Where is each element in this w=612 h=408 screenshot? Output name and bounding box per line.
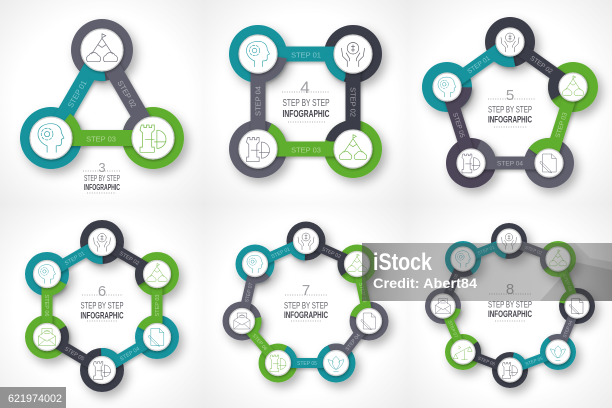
- band: step 01: STEP 01: [466, 55, 492, 76]
- band: step 02: STEP 02: [528, 55, 554, 76]
- band: step 01: STEP 01: [291, 51, 321, 60]
- title: 5 step by step: INFOGRAPHIC: [488, 114, 532, 126]
- band: step 02: [102, 242, 181, 298]
- band: step 06: STEP 06: [477, 356, 496, 367]
- icon: castle: [498, 358, 522, 382]
- band: step 04: [84, 337, 157, 388]
- panel: 3 step triangle: [14, 19, 184, 193]
- icon: head: [30, 117, 72, 159]
- icon: hands: [294, 228, 318, 254]
- ring bodies: [229, 25, 382, 178]
- ring bodies: [425, 223, 595, 388]
- band: step 03: STEP 03: [155, 295, 161, 316]
- band: step 02: [510, 42, 600, 114]
- ring bodies: [222, 222, 388, 382]
- band: step 04: STEP 04: [562, 319, 574, 338]
- band: step 01: STEP 01: [477, 244, 496, 256]
- band: step 04: STEP 04: [345, 333, 362, 352]
- band: step 04: [445, 137, 549, 189]
- band: step 05: STEP 05: [297, 361, 317, 367]
- band: step 04: [230, 26, 286, 149]
- band: step 01: [447, 19, 533, 87]
- icon: document: [535, 149, 563, 177]
- band: step 03: [349, 264, 389, 341]
- title: 6 step by step: 6: [98, 283, 106, 300]
- watermark band: [362, 243, 612, 301]
- band: step 01: STEP 01: [66, 79, 89, 109]
- band: step 02: STEP 02: [321, 246, 342, 260]
- panel: 4 step square: [225, 23, 384, 182]
- title: 7 step by step: 7: [302, 282, 310, 299]
- icon: mountain: [81, 29, 123, 71]
- title: 7 step by step: INFOGRAPHIC: [284, 310, 328, 321]
- band: step 02: [102, 50, 179, 164]
- nodes with icons: [230, 228, 382, 376]
- icon: mountain: [546, 247, 570, 271]
- icon: head: [239, 35, 277, 73]
- band: step 06: STEP 06: [43, 295, 49, 316]
- band: step 06: [442, 331, 510, 373]
- title: 3 step by step: INFOGRAPHIC: [84, 183, 120, 192]
- band: step 02: [322, 54, 384, 180]
- connector bands: [225, 23, 384, 182]
- icon: hands: [88, 228, 116, 256]
- band: step 03: [14, 101, 153, 175]
- band: step 05: [427, 67, 471, 163]
- connector bands: [425, 223, 595, 388]
- icon: head: [34, 260, 60, 288]
- ring bodies: [422, 17, 598, 188]
- connector bands: [14, 22, 179, 175]
- icon: mountain: [559, 73, 587, 101]
- icon: lotus: [324, 350, 348, 376]
- band: step 06: [223, 302, 278, 363]
- title: 6 step by step: INFOGRAPHIC: [80, 310, 124, 322]
- panel: 8 step octagon: [425, 223, 595, 388]
- icon: castle: [88, 356, 116, 384]
- nodes with icons: [34, 228, 170, 384]
- band: step 06: STEP 06: [251, 333, 268, 352]
- band: step 04: STEP 04: [119, 346, 141, 363]
- band: step 06: [23, 250, 71, 337]
- band: step 01: [258, 23, 384, 85]
- ring bodies: [25, 220, 179, 392]
- title: 3 step by step: [83, 160, 120, 193]
- panel: 5 step pentagon: [422, 17, 600, 190]
- band: step 05: [492, 352, 558, 388]
- band: step 05: STEP 05: [451, 112, 466, 139]
- title: 5 step by step: 5: [506, 87, 514, 104]
- icon: castle: [239, 130, 277, 168]
- icon: mountain: [334, 130, 372, 168]
- band: step 02: [509, 238, 579, 280]
- icon: castle: [266, 350, 290, 376]
- band: step 01: [255, 223, 324, 264]
- band: step 02: STEP 02: [115, 79, 138, 109]
- band: step 07: [232, 241, 278, 321]
- band: step 07: [425, 288, 463, 352]
- band: step 03: [558, 259, 595, 324]
- band: step 03: STEP 03: [357, 282, 367, 303]
- band: step 02: STEP 02: [348, 87, 357, 117]
- nodes with icons: [30, 29, 174, 159]
- ring bodies: [20, 19, 184, 169]
- icon: lotus: [546, 340, 570, 364]
- icon: castle: [457, 149, 485, 177]
- watermark band: Credit: Abert84: [373, 276, 478, 291]
- icon: mail: [431, 294, 455, 318]
- band: step 05: [23, 313, 102, 370]
- image id tag: 621974002: [8, 393, 62, 405]
- connector bands: [23, 224, 181, 388]
- nodes with icons: [433, 28, 587, 177]
- band: step 03: STEP 03: [555, 111, 569, 139]
- band: step 04: [537, 306, 579, 373]
- nodes with icons: [431, 229, 589, 382]
- band: step 08: [442, 238, 484, 306]
- watermark band: iStock: [373, 249, 433, 276]
- title: 6 step by step: STEP BY STEP: [80, 300, 124, 312]
- band: step 03: [133, 274, 181, 361]
- band: step 01: [463, 223, 527, 259]
- title: 6 step by step: [80, 283, 124, 322]
- band: step 03: STEP 03: [86, 135, 116, 144]
- band: step 02: STEP 02: [524, 245, 543, 256]
- title: 3 step by step: STEP BY STEP: [84, 174, 120, 183]
- image id tag: [0, 387, 66, 408]
- band: step 04: STEP 04: [254, 86, 263, 116]
- band: step 07: STEP 07: [447, 320, 459, 339]
- title: 4 step by step: 4: [300, 78, 310, 97]
- band: step 03: [225, 116, 353, 182]
- icon: mountain: [144, 260, 170, 288]
- icon: mountain: [344, 252, 370, 276]
- band: step 02: [306, 241, 379, 286]
- title: 7 step by step: STEP BY STEP: [284, 300, 328, 312]
- icon: hands: [334, 35, 372, 73]
- icon: hands: [496, 28, 524, 56]
- icon: scales: [451, 340, 475, 364]
- band: step 08: STEP 08: [447, 273, 459, 292]
- panel: 7 step heptagon: [222, 222, 389, 385]
- icon: head: [242, 252, 268, 276]
- nodes with icons: [239, 35, 372, 168]
- title: 4 step by step: INFOGRAPHIC: [282, 109, 330, 120]
- title: 5 step by step: STEP BY STEP: [488, 104, 532, 116]
- icon: castle: [132, 117, 174, 159]
- icon: document: [356, 308, 382, 334]
- title: 5 step by step: [488, 87, 535, 127]
- title: 4 step by step: STEP BY STEP: [282, 98, 330, 109]
- band: step 01: STEP 01: [64, 251, 86, 267]
- title: 4 step by step: [282, 78, 330, 122]
- icon: hands: [497, 229, 521, 253]
- icon: head: [433, 73, 461, 101]
- icon: document: [144, 324, 170, 350]
- title: 8 step by step: INFOGRAPHIC: [488, 309, 532, 320]
- connector bands: [223, 223, 389, 385]
- band: step 05: [256, 341, 336, 385]
- title: 8 step by step: STEP BY STEP: [488, 300, 532, 310]
- band: step 02: STEP 02: [118, 251, 140, 267]
- band: step 01: STEP 01: [271, 246, 291, 260]
- band: step 03: STEP 03: [291, 146, 321, 155]
- band: step 05: STEP 05: [525, 355, 544, 367]
- title: 3 step by step: 3: [98, 160, 106, 175]
- title: 7 step by step: [284, 282, 328, 321]
- band: step 04: [315, 321, 369, 384]
- icon: mail: [34, 324, 60, 350]
- icon: mail: [230, 308, 254, 334]
- band: step 01: [51, 22, 130, 138]
- icon: document: [565, 294, 589, 318]
- panel: 6 step hexagon: [23, 220, 181, 392]
- band: step 04: STEP 04: [497, 160, 523, 167]
- title: 8 step by step: [488, 281, 532, 321]
- title: 8 step by step: 8: [506, 281, 514, 298]
- band: step 03: STEP 03: [562, 273, 573, 292]
- connector bands: [427, 19, 600, 190]
- band: step 05: STEP 05: [63, 346, 85, 363]
- band: step 03: [522, 87, 576, 190]
- band: step 01: [47, 224, 120, 274]
- icon: head: [451, 247, 475, 271]
- band: step 07: STEP 07: [244, 282, 254, 303]
